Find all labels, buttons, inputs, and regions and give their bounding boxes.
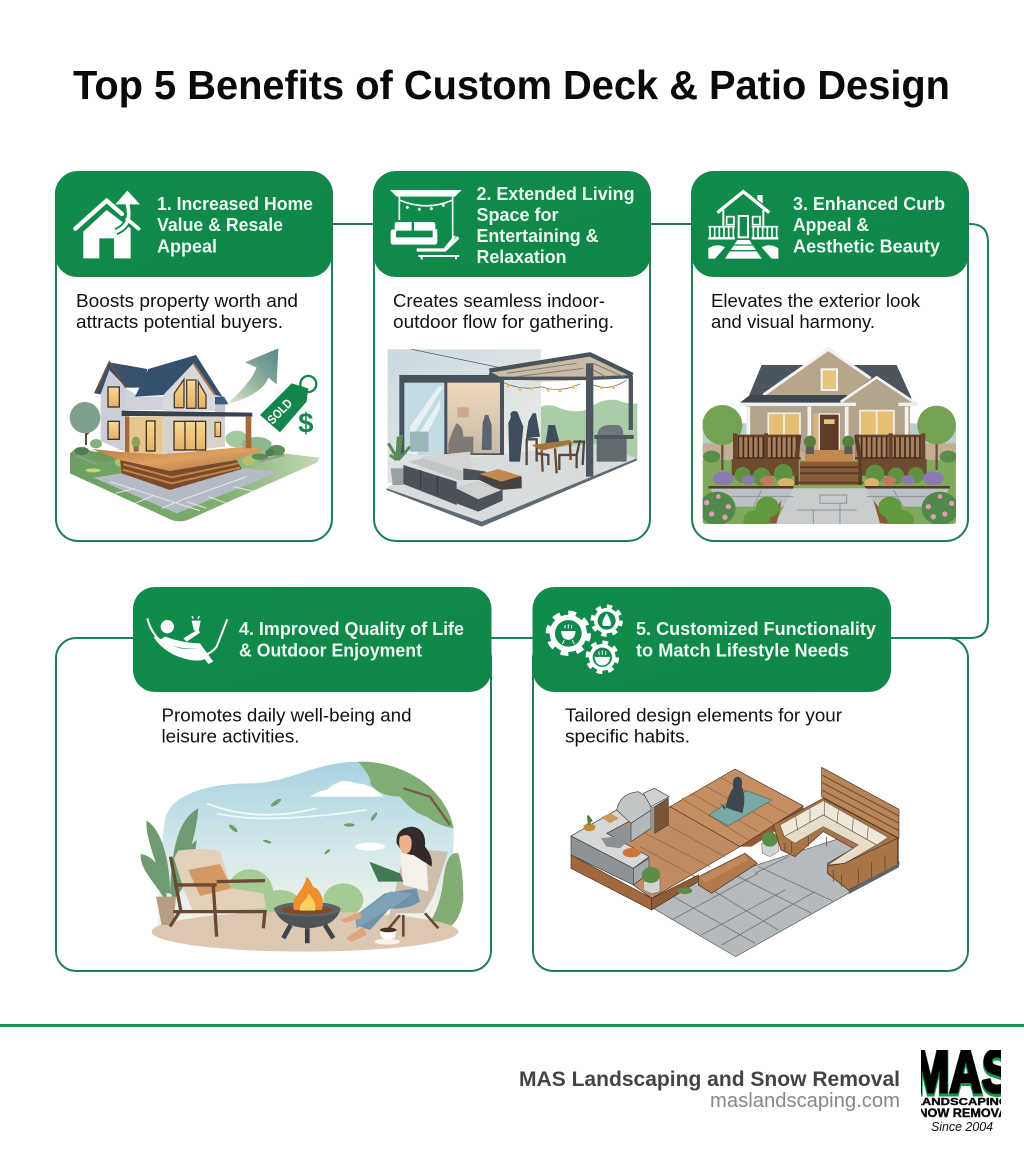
card 5 description [565,706,842,746]
card 5 heading: 5. Customized Functionality [636,619,876,639]
panel: card 4 [56,587,492,971]
card 4 heading: 4. Improved Quality of Life [239,619,464,639]
footer divider [0,1024,1024,1027]
footer company name: MAS Landscaping and Snow Removal [519,1067,900,1091]
footer website: maslandscaping.com [710,1090,900,1112]
illustration: front view of house with landscaping [699,347,958,531]
card 1 description: Boosts property worth and [76,291,298,311]
title: Top 5 Benefits of Custom Deck & Patio Design [73,62,950,108]
icon: house with rising arrow [75,191,140,258]
illustration: woman reading by fire pit [141,760,463,952]
panel: card 5 [532,587,968,971]
illustration: house with deck and sold tag: $ [298,408,314,439]
card 1 heading [157,194,313,256]
card 5 header [532,587,891,692]
card 2 header [374,172,650,277]
panel: card 3 [692,172,968,541]
illustration: house with deck and sold tag [70,348,319,521]
card 2 description [393,291,614,332]
icon: house with porch and path [708,192,778,259]
card 1 heading: Value & Resale [157,215,283,235]
panel: card 1 [55,172,332,541]
panel: card 2 [374,172,650,541]
card 2 description: Creates seamless indoor- [393,291,605,311]
logo: SNOW REMOVAL [910,1108,1015,1120]
card 4 heading: & Outdoor Enjoyment [239,640,422,660]
card 3 description: and visual harmony. [711,312,875,332]
card 4 description: leisure activities. [162,726,300,746]
card 4 description: Promotes daily well-being and [162,706,412,726]
card 5 description: Tailored design elements for your [565,706,842,726]
card 3 heading: Aesthetic Beauty [793,236,940,256]
card 1 description [76,291,298,332]
card 2 heading [476,184,634,267]
card 5 heading [636,619,876,660]
logo: Since 2004 [931,1119,993,1134]
card 4 description [162,706,412,746]
illustration: covered patio with dining and sofa [387,349,637,527]
icon: person in hammock with drink [147,616,227,664]
card 3 heading: Appeal & [793,215,869,235]
icon: pergola sofa and lounger [390,190,462,259]
card 2 heading: 2. Extended Living [476,184,634,204]
card 3 heading: 3. Enhanced Curb [793,194,945,214]
card 3 heading [793,194,945,256]
card 5 description: specific habits. [565,726,690,746]
card 1 heading: Appeal [157,236,217,256]
card 2 heading: Space for [476,205,558,225]
card 4 header [133,587,492,692]
card 5 heading: to Match Lifestyle Needs [636,640,849,660]
card 3 header [692,172,968,277]
logo [921,1050,1001,1131]
card 1 description: attracts potential buyers. [76,312,283,332]
card 2 description: outdoor flow for gathering. [393,312,614,332]
card 3 description: Elevates the exterior look [711,291,921,311]
logo: LANDSCAPING [914,1096,1009,1108]
card 3 description [711,291,921,332]
card 1 heading: 1. Increased Home [157,194,313,214]
connector lines between cards [332,224,988,638]
card 2 heading: Relaxation [476,247,566,267]
card 1 header [55,172,332,277]
illustration: isometric deck and patio plan [571,767,899,957]
icon: three gears [548,607,621,672]
card 2 heading: Entertaining & [476,226,598,246]
card 4 heading [239,619,464,660]
illustration: house with deck and sold tag: SOLD [265,396,295,427]
